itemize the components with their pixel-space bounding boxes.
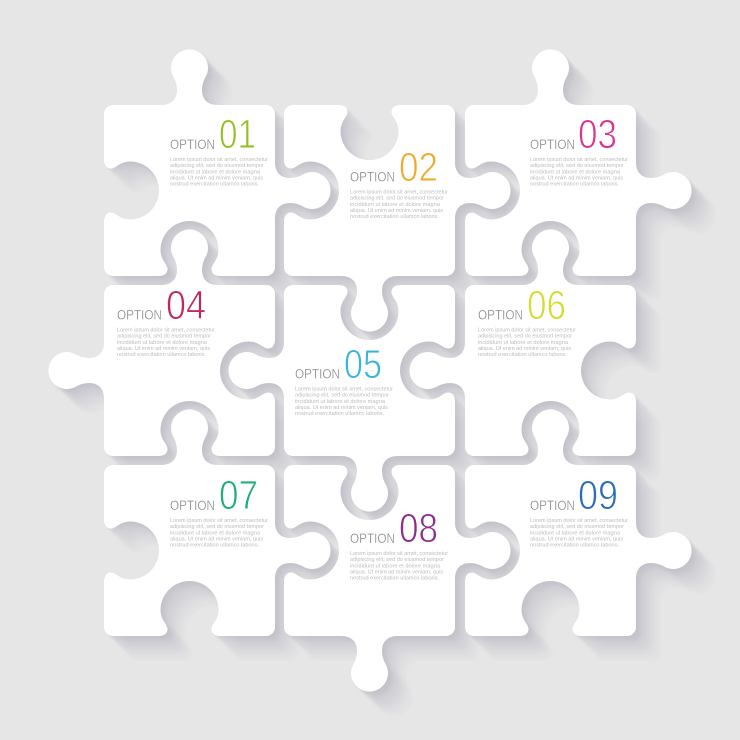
- text block 01: [170, 157, 268, 188]
- panel: puzzle piece 02: [284, 105, 511, 332]
- label: option 09: OPTION: [530, 497, 575, 513]
- label: option 07: [170, 472, 258, 518]
- label: option 01: OPTION: [170, 136, 215, 152]
- label: option 07: 07: [219, 472, 258, 518]
- label: option 08: 08: [399, 505, 438, 551]
- panel: puzzle piece 09: [465, 409, 692, 636]
- label: option 03: [530, 111, 617, 157]
- panel: puzzle piece 04: [48, 229, 275, 456]
- label: option 01: [170, 111, 256, 157]
- panel: puzzle piece 01: [104, 49, 331, 276]
- label: option 09: [530, 472, 618, 518]
- label: option 04: OPTION: [117, 306, 162, 322]
- text block 09: [530, 518, 628, 549]
- label: option 04: [117, 282, 206, 328]
- label: option 06: 06: [527, 282, 566, 328]
- panel: puzzle piece 08: [284, 465, 511, 692]
- label: option 06: OPTION: [478, 306, 523, 322]
- label: option 08: [350, 505, 438, 551]
- text block 03: [530, 157, 628, 188]
- panel: puzzle piece 05: [228, 285, 455, 512]
- label: option 05: OPTION: [295, 366, 340, 382]
- label: option 05: [295, 341, 382, 387]
- label: option 03: OPTION: [530, 136, 575, 152]
- label: option 07: OPTION: [170, 497, 215, 513]
- text block 06: [478, 328, 576, 358]
- text block 07: [170, 518, 268, 549]
- label: option 01: 01: [219, 111, 256, 157]
- panel: puzzle piece 06: [409, 229, 636, 456]
- label: option 02: [350, 144, 438, 190]
- label: option 06: [478, 282, 566, 328]
- label: option 09: 09: [578, 472, 618, 518]
- label: option 08: OPTION: [350, 530, 395, 546]
- panel: puzzle piece 07: [104, 409, 331, 636]
- label: option 02: 02: [399, 144, 438, 190]
- text block 02: [350, 190, 448, 220]
- panel: puzzle piece 03: [465, 49, 692, 276]
- label: option 05: 05: [344, 341, 382, 387]
- text block 08: [350, 551, 448, 582]
- label: option 04: 04: [166, 282, 206, 328]
- label: option 03: 03: [578, 111, 617, 157]
- text block 05: [295, 386, 393, 417]
- text block 04: [117, 328, 215, 358]
- label: option 02: OPTION: [350, 168, 395, 184]
